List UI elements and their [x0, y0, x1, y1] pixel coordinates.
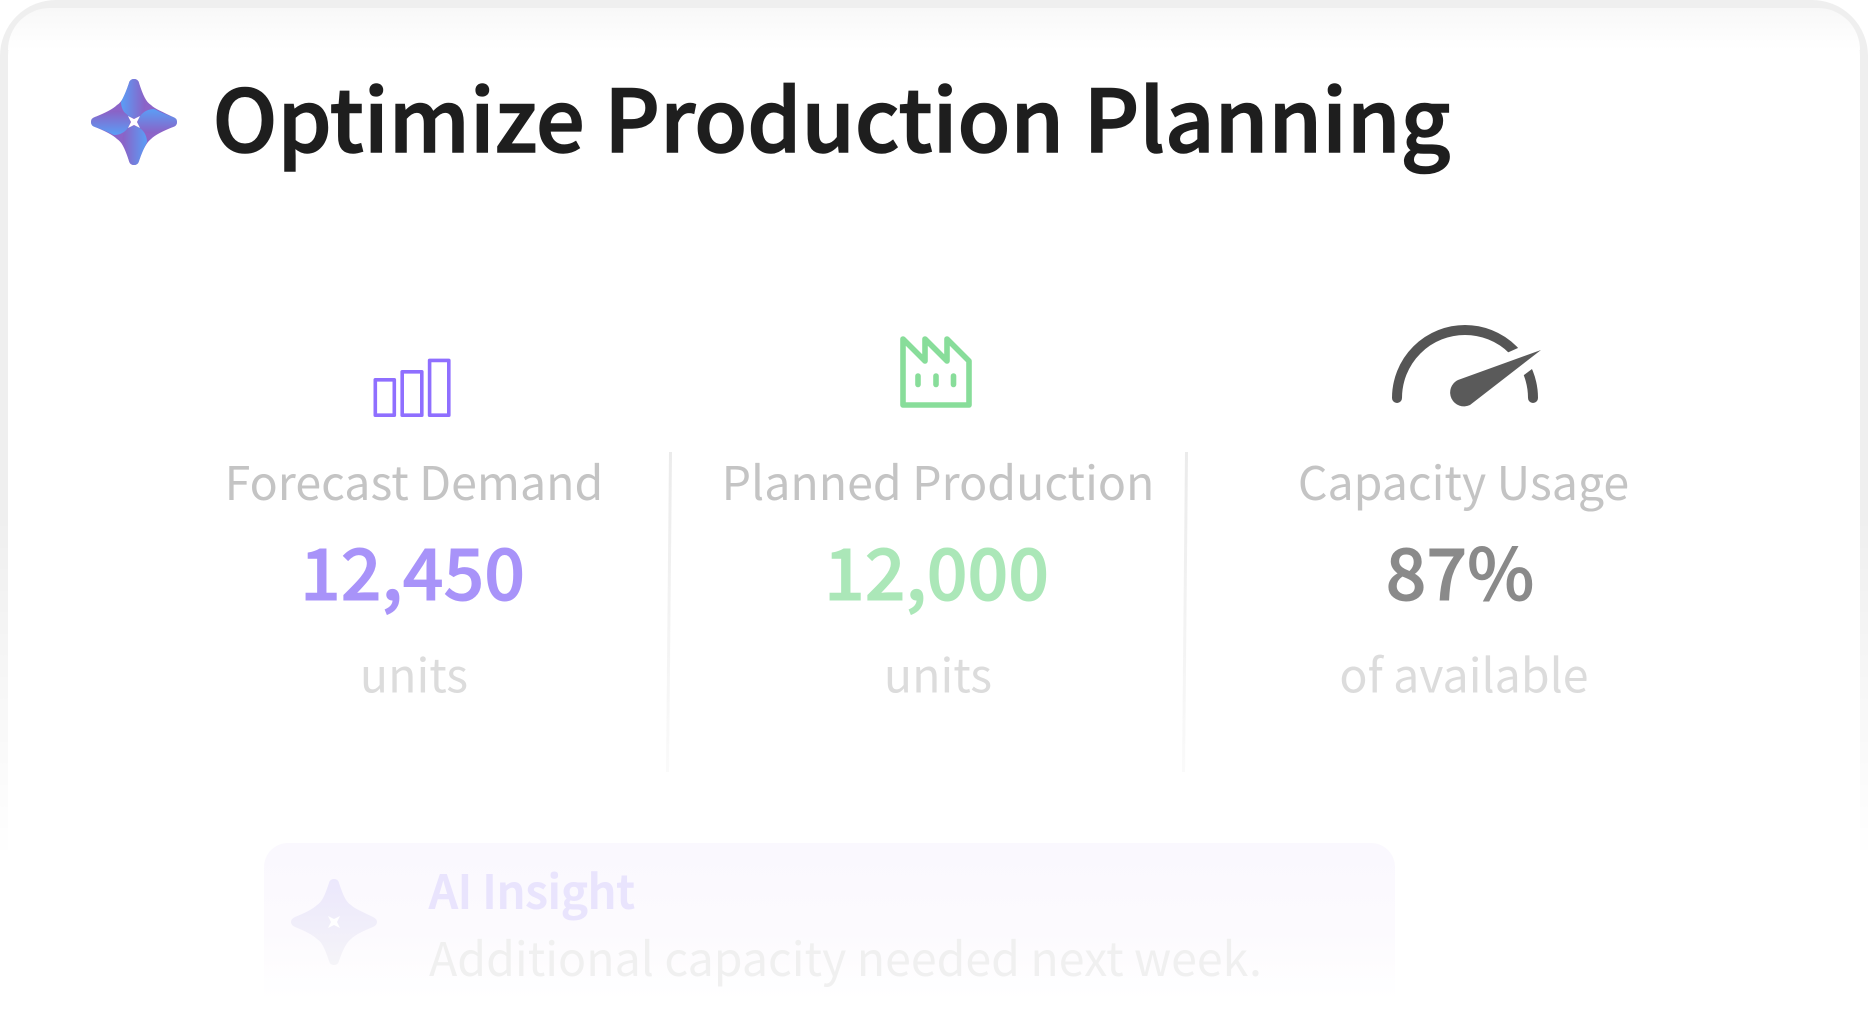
insight text: Additional capacity needed next week. [429, 923, 1262, 990]
label: Planned Production [722, 447, 1154, 514]
icon: faint sparkle [291, 879, 377, 965]
title: Optimize Production Planning [212, 52, 1450, 177]
metric: planned production [722, 339, 1154, 706]
label: Forecast Demand [225, 447, 603, 514]
insight heading: AI Insight [429, 856, 635, 922]
value: 87% [1386, 517, 1534, 621]
metric: capacity usage [1298, 330, 1629, 706]
unit: of available [1339, 640, 1589, 706]
metric: forecast demand [225, 360, 603, 706]
divider [666, 452, 672, 772]
icon: factory [903, 339, 969, 405]
value: 12,000 [824, 517, 1049, 621]
insight background [264, 843, 1395, 1000]
unit: units [884, 640, 992, 706]
header [91, 52, 1450, 177]
divider [1182, 452, 1188, 772]
value: 12,450 [300, 517, 525, 621]
icon: AI sparkle [91, 79, 177, 165]
icon: gauge [1397, 330, 1541, 406]
unit: units [360, 640, 468, 706]
panel: AI insight [264, 843, 1395, 1000]
label: Capacity Usage [1298, 447, 1629, 514]
icon: bar chart [375, 360, 449, 415]
card frame [0, 0, 1868, 678]
